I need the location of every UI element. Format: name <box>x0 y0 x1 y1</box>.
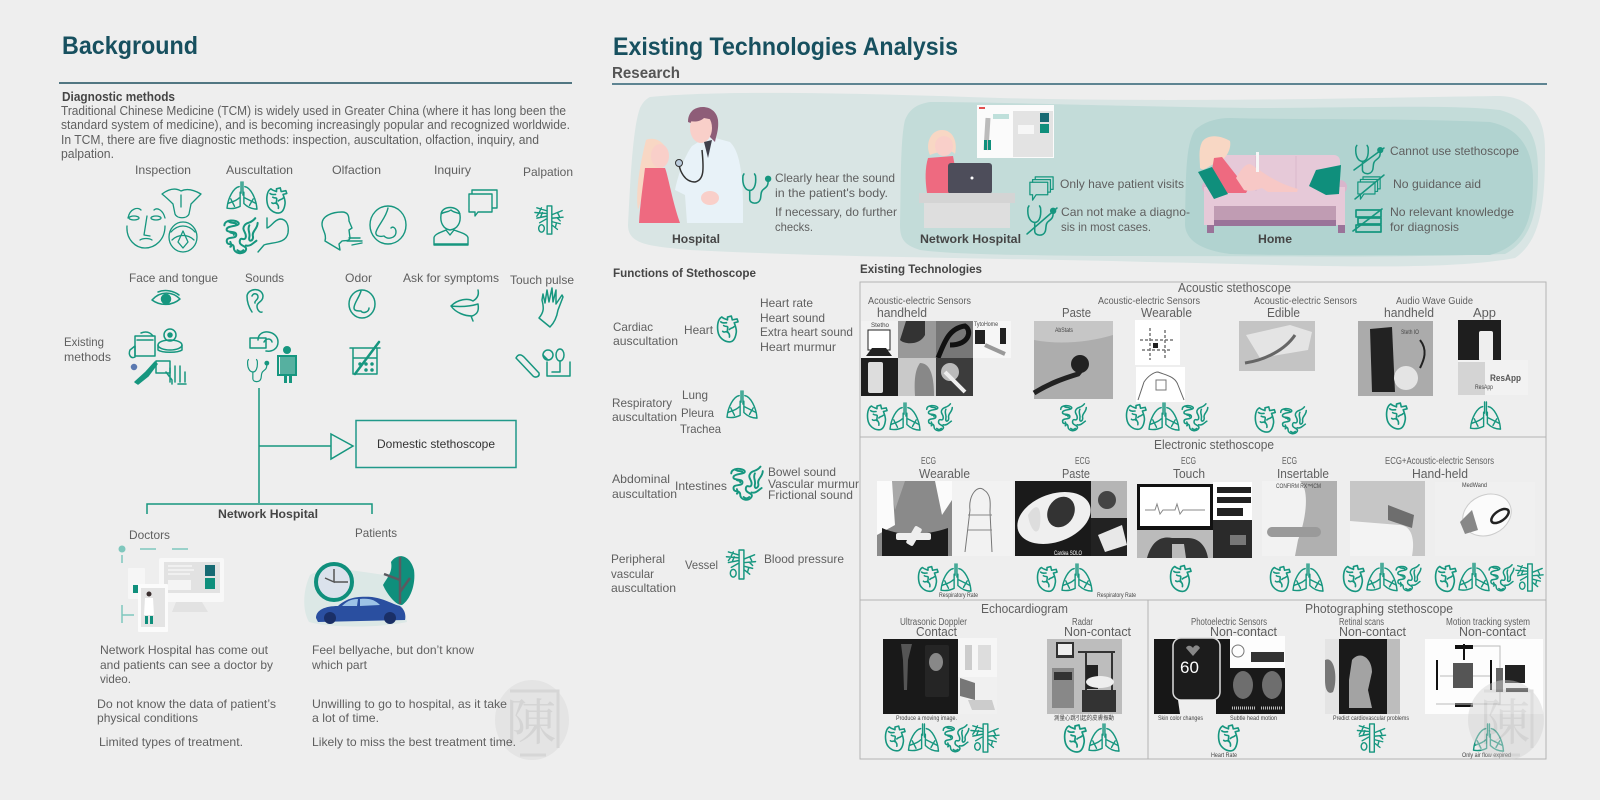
label: home: Home <box>1258 232 1292 246</box>
icons: photographing coverage <box>1219 724 1504 752</box>
heading and labels: electronic: Wearable <box>919 466 970 481</box>
icon: nose <box>349 290 375 318</box>
photos: app: ResApp <box>1490 373 1521 383</box>
text: patients problems: a lot of time. <box>312 711 379 725</box>
row: peripheral vascular auscultation <box>611 550 844 595</box>
table grid <box>860 282 1546 759</box>
labels: what is observed: Ask for symptoms <box>403 271 499 285</box>
icon: face and tongue <box>127 189 201 252</box>
text: doctors problems: Limited types of treatment. <box>99 735 243 749</box>
text: home notes: Cannot use stethoscope <box>1390 144 1519 158</box>
text block: diagnostic methods <box>61 89 570 161</box>
icons: electronic coverage <box>919 563 1543 591</box>
icon: lips <box>451 290 478 321</box>
text: patients problems: Feel bellyache, but don’t know <box>312 643 474 657</box>
subheading: research: Research <box>612 65 680 82</box>
label: doctors: Doctors <box>129 528 170 542</box>
heading and labels: echocardiogram: Ultrasonic Doppler <box>900 617 968 628</box>
text: hospital notes: If necessary, do further <box>775 205 897 219</box>
label: network hospital: Network Hospital <box>920 232 1021 246</box>
row: cardiac auscultation: Heart <box>684 323 714 337</box>
photos: handheld group: Stetho <box>871 323 890 329</box>
captions: respiratory rate: Respiratory Rate <box>939 593 979 599</box>
text: hospital notes: in the patient's body. <box>775 186 888 200</box>
illustration: hospital doctor and girl <box>637 107 743 223</box>
row: respiratory auscultation: auscultation <box>612 410 677 424</box>
text: doctors problems: physical conditions <box>97 711 198 725</box>
icon: beaker <box>350 342 380 374</box>
text: doctors problems: video. <box>100 672 131 686</box>
photo: insertable <box>1262 481 1337 556</box>
labels: five methods: Olfaction <box>332 163 381 177</box>
icon: stethoscope hospital <box>743 174 771 203</box>
text: hospital notes <box>775 171 897 234</box>
captions: heart rate and air flow: Only air flow expired <box>1462 753 1511 759</box>
row: respiratory auscultation <box>612 388 757 436</box>
captions: echocardiogram: 測量心跳引起的皮膚振動 <box>1054 714 1114 722</box>
text block: diagnostic methods: Diagnostic methods <box>62 89 175 104</box>
text: hospital notes: checks. <box>775 220 813 234</box>
heading and labels: photographing: Photoelectric Sensors <box>1191 617 1267 628</box>
row: abdominal auscultation <box>612 465 859 502</box>
icon: thermometer and blood pressure cuff <box>516 349 570 377</box>
icon: olfaction <box>322 206 406 250</box>
captions: respiratory rate <box>939 593 1137 599</box>
captions: photographing: Predict cardiovascular problems <box>1333 716 1409 722</box>
labels: what is observed <box>129 271 574 287</box>
photos: hand-held ECG: MedWand <box>1462 483 1487 489</box>
heading and labels: electronic: Paste <box>1062 466 1090 481</box>
icon: stethoscope crossed <box>1027 206 1057 235</box>
row: peripheral vascular auscultation: Vessel <box>685 558 718 572</box>
heading and labels: photographing: Non-contact <box>1339 624 1406 639</box>
text: existing methods: methods <box>64 350 111 364</box>
text: patients problems: which part <box>311 658 368 672</box>
row: abdominal auscultation: Vascular murmur <box>768 477 859 491</box>
section: photographing stethoscope <box>1154 601 1544 760</box>
photo: insertable: CONFIRM RX™ICM <box>1276 483 1321 490</box>
icon: auscultation tools <box>248 332 296 383</box>
heading and labels: acoustic: handheld <box>1384 305 1434 320</box>
icon: palpation vessel <box>535 206 563 234</box>
heading and labels: photographing: Non-contact <box>1459 624 1526 639</box>
photos: paste ECG: Cardea SOLO <box>1054 551 1082 557</box>
text: existing methods <box>64 335 111 364</box>
heading and labels: acoustic: Acoustic stethoscope <box>1178 280 1291 295</box>
row: cardiac auscultation: auscultation <box>613 334 678 348</box>
captions: echocardiogram: Produce a moving image. <box>896 716 957 722</box>
labels: what is observed: Odor <box>345 271 372 285</box>
labels: five methods: Inquiry <box>434 163 471 177</box>
photo: edible <box>1239 321 1315 371</box>
row: abdominal auscultation: Intestines <box>675 479 727 493</box>
row: cardiac auscultation: Heart murmur <box>760 340 836 354</box>
labels: five methods: Auscultation <box>226 163 293 177</box>
heading: existing technologies analysis: Existing Technologies Analysis <box>613 33 958 61</box>
photo: motion tracking <box>1425 639 1543 714</box>
watermark seal: right <box>1468 680 1544 760</box>
icon: ear <box>247 290 263 312</box>
icon: books crossed <box>1353 209 1382 232</box>
text: hospital notes: Clearly hear the sound <box>775 171 895 185</box>
photo: audio wave guide <box>1358 321 1433 396</box>
captions: respiratory rate: Respiratory Rate <box>1097 593 1137 599</box>
box: domestic stethoscope: Domestic stethoscope <box>377 437 495 451</box>
text: home notes: No guidance aid <box>1393 177 1481 191</box>
heading and labels: acoustic <box>868 280 1496 320</box>
row: respiratory auscultation: Lung <box>682 388 708 402</box>
text: doctors problems: and patients can see a doctor by <box>100 658 273 672</box>
row: respiratory auscultation: Respiratory <box>612 396 672 410</box>
text: network hospital notes: sis in most cases. <box>1061 220 1151 234</box>
row: peripheral vascular auscultation: Blood pressure <box>764 552 844 566</box>
box: domestic stethoscope <box>356 420 516 468</box>
labels: five methods: Palpation <box>523 165 573 179</box>
labels: five methods: Inspection <box>135 163 191 177</box>
heading and labels: electronic: ECG <box>1181 456 1196 467</box>
heading and labels: electronic: ECG <box>921 456 936 467</box>
heading and labels: echocardiogram <box>900 601 1131 639</box>
photos: ultrasonic doppler <box>883 638 997 714</box>
heading and labels: acoustic: Audio Wave Guide <box>1396 296 1473 307</box>
text: network hospital notes <box>1060 177 1190 234</box>
heading and labels: acoustic: App <box>1473 305 1496 320</box>
row: cardiac auscultation: Extra heart sound <box>760 325 853 339</box>
heading: functions of stethoscope: Functions of Stethoscope <box>613 266 756 280</box>
photos: wearable <box>1135 320 1185 402</box>
photos: app <box>1458 320 1528 395</box>
watermark seal: left <box>495 680 569 760</box>
label: patients: Patients <box>355 526 397 540</box>
row: cardiac auscultation <box>613 296 853 354</box>
text block: diagnostic methods: standard system of medicine), and is becoming increasingly popular and recognized worldwide. <box>61 117 570 132</box>
heading: existing technologies: Existing Technologies <box>860 262 982 276</box>
icon: chat bubbles <box>1030 177 1053 200</box>
photos: handheld group: TytoHome <box>974 322 999 328</box>
captions: photographing: Subtle head motion <box>1230 716 1277 722</box>
labels: five methods <box>135 163 573 179</box>
heading and labels: electronic: ECG+Acoustic-electric Sensors <box>1385 456 1494 467</box>
captions: heart rate and air flow: Heart Rate <box>1211 753 1238 759</box>
photos: wearable ECG <box>877 481 1013 556</box>
row: cardiac auscultation: Heart sound <box>760 311 825 325</box>
text: home notes: for diagnosis <box>1390 220 1459 234</box>
text: doctors problems <box>97 643 276 749</box>
row: abdominal auscultation: Frictional sound <box>768 488 853 502</box>
panel: background <box>59 32 574 760</box>
section: echocardiogram <box>883 601 1131 752</box>
row: cardiac auscultation: Cardiac <box>613 320 653 334</box>
row: abdominal auscultation: auscultation <box>612 487 677 501</box>
heading and labels: photographing: Photographing stethoscope <box>1305 601 1453 616</box>
heading and labels: photographing <box>1191 601 1530 639</box>
panel: research blobs <box>628 93 1545 266</box>
heading and labels: echocardiogram: Echocardiogram <box>981 601 1068 616</box>
watermark seal: right: 陳 <box>1480 683 1530 755</box>
heading and labels: electronic: ECG <box>1282 456 1297 467</box>
photos: photoelectric sensors: 60 <box>1180 658 1199 677</box>
text: network hospital notes: Can not make a diagno- <box>1061 205 1190 219</box>
icons: acoustic coverage <box>868 402 1500 434</box>
text: existing methods: Existing <box>64 335 104 349</box>
panel: functions of stethoscope <box>611 266 859 595</box>
row: peripheral vascular auscultation: vascular <box>611 567 654 581</box>
watermark seal: left: 陳 <box>506 683 556 755</box>
heading and labels: echocardiogram: Non-contact <box>1064 624 1131 639</box>
labels: what is observed: Face and tongue <box>129 271 218 285</box>
text block: diagnostic methods: palpation. <box>61 146 114 161</box>
heading and labels: electronic: Hand-held <box>1412 466 1468 481</box>
photos: photoelectric sensors <box>1154 636 1285 714</box>
heading and labels: acoustic: Acoustic-electric Sensors <box>1254 296 1357 307</box>
photos: handheld group <box>861 321 1011 396</box>
heading and labels: electronic: ECG <box>1075 456 1090 467</box>
photos: touch ECG <box>1137 482 1252 558</box>
icon: hand <box>539 288 563 327</box>
heading and labels: acoustic: Acoustic-electric Sensors <box>868 296 971 307</box>
icons: echocardiogram coverage <box>886 724 1119 752</box>
captions: photographing <box>1158 716 1409 722</box>
labels: what is observed: Touch pulse <box>510 273 574 287</box>
icon: organs <box>224 182 288 253</box>
heading and labels: photographing: Motion tracking system <box>1446 617 1530 628</box>
icon: inspection tools <box>129 329 186 384</box>
heading and labels: acoustic: Edible <box>1267 305 1300 320</box>
text block: diagnostic methods: Traditional Chinese Medicine (TCM) is widely used in Greater China (where it has long been the <box>61 103 566 118</box>
heading and labels: electronic <box>919 437 1494 481</box>
heading and labels: photographing: Non-contact <box>1210 624 1277 639</box>
row: respiratory auscultation: Trachea <box>680 422 721 436</box>
arrow: tree connector <box>147 388 372 514</box>
section: acoustic stethoscope <box>861 280 1528 434</box>
panel: existing technologies <box>860 262 1546 760</box>
row: cardiac auscultation: Heart rate <box>760 296 813 310</box>
text: doctors problems: Network Hospital has come out <box>100 643 269 657</box>
row: peripheral vascular auscultation: Peripheral <box>611 552 665 566</box>
photo: retinal scans <box>1325 639 1400 714</box>
photos: hand-held ECG <box>1350 481 1535 556</box>
heading and labels: acoustic: Paste <box>1062 305 1091 320</box>
photo: paste <box>1034 321 1113 399</box>
heading and labels: electronic: Insertable <box>1277 466 1329 481</box>
row: abdominal auscultation: Bowel sound <box>768 465 836 479</box>
illustration: home sofa and patient <box>1198 136 1347 233</box>
captions: heart rate and air flow <box>1211 753 1511 759</box>
heading and labels: photographing: Retinal scans <box>1339 617 1384 628</box>
heading and labels: acoustic: Wearable <box>1141 305 1192 320</box>
icon: inquiry <box>434 190 497 245</box>
text: patients problems <box>311 643 516 749</box>
text: patients problems: Unwilling to go to hospital, as it take <box>312 697 507 711</box>
icon: eye <box>152 291 180 304</box>
icon: chat crossed <box>1355 175 1384 199</box>
heading: Background: Background <box>62 32 198 60</box>
heading and labels: electronic: Electronic stethoscope <box>1154 437 1274 452</box>
heading and labels: echocardiogram: Radar <box>1072 617 1094 628</box>
illustration: network hospital patient at laptop <box>919 105 1054 228</box>
text: doctors problems: Do not know the data of patient’s <box>97 697 276 711</box>
row: abdominal auscultation: Abdominal <box>612 472 670 486</box>
photo: paste: AbStats <box>1055 328 1073 334</box>
section: electronic stethoscope <box>877 437 1543 599</box>
heading and labels: acoustic: Acoustic-electric Sensors <box>1098 296 1200 307</box>
text: home notes <box>1390 144 1519 234</box>
photo: audio wave guide: Steth IO <box>1401 330 1419 336</box>
labels: what is observed: Sounds <box>245 271 284 285</box>
captions: photographing: Skin color changes <box>1158 716 1203 722</box>
photo: radar <box>1047 639 1122 714</box>
illustration: doctors on devices <box>118 546 224 632</box>
text: network hospital notes: Only have patient visits <box>1060 177 1184 191</box>
illustration: clock, tree and car <box>304 556 414 626</box>
row: respiratory auscultation: Pleura <box>681 406 714 420</box>
photos: paste ECG <box>1010 481 1127 557</box>
heading and labels: electronic: Touch <box>1173 466 1205 481</box>
heading: network hospital: Network Hospital <box>218 507 318 521</box>
heading and labels: echocardiogram: Contact <box>916 624 957 639</box>
panel: existing technologies analysis <box>611 33 1547 760</box>
captions: echocardiogram <box>896 714 1114 722</box>
label: hospital: Hospital <box>672 232 720 246</box>
text: home notes: No relevant knowledge <box>1390 205 1514 219</box>
photos: app: ResApp <box>1475 385 1494 391</box>
row: peripheral vascular auscultation: auscultation <box>611 581 676 595</box>
icon: stethoscope crossed home <box>1354 145 1384 174</box>
text: patients problems: Likely to miss the best treatment time. <box>312 735 516 749</box>
heading and labels: acoustic: handheld <box>877 305 927 320</box>
text block: diagnostic methods: In TCM, there are five diagnostic methods: inspection, auscultation, olfaction, inquiry, and <box>61 132 539 147</box>
